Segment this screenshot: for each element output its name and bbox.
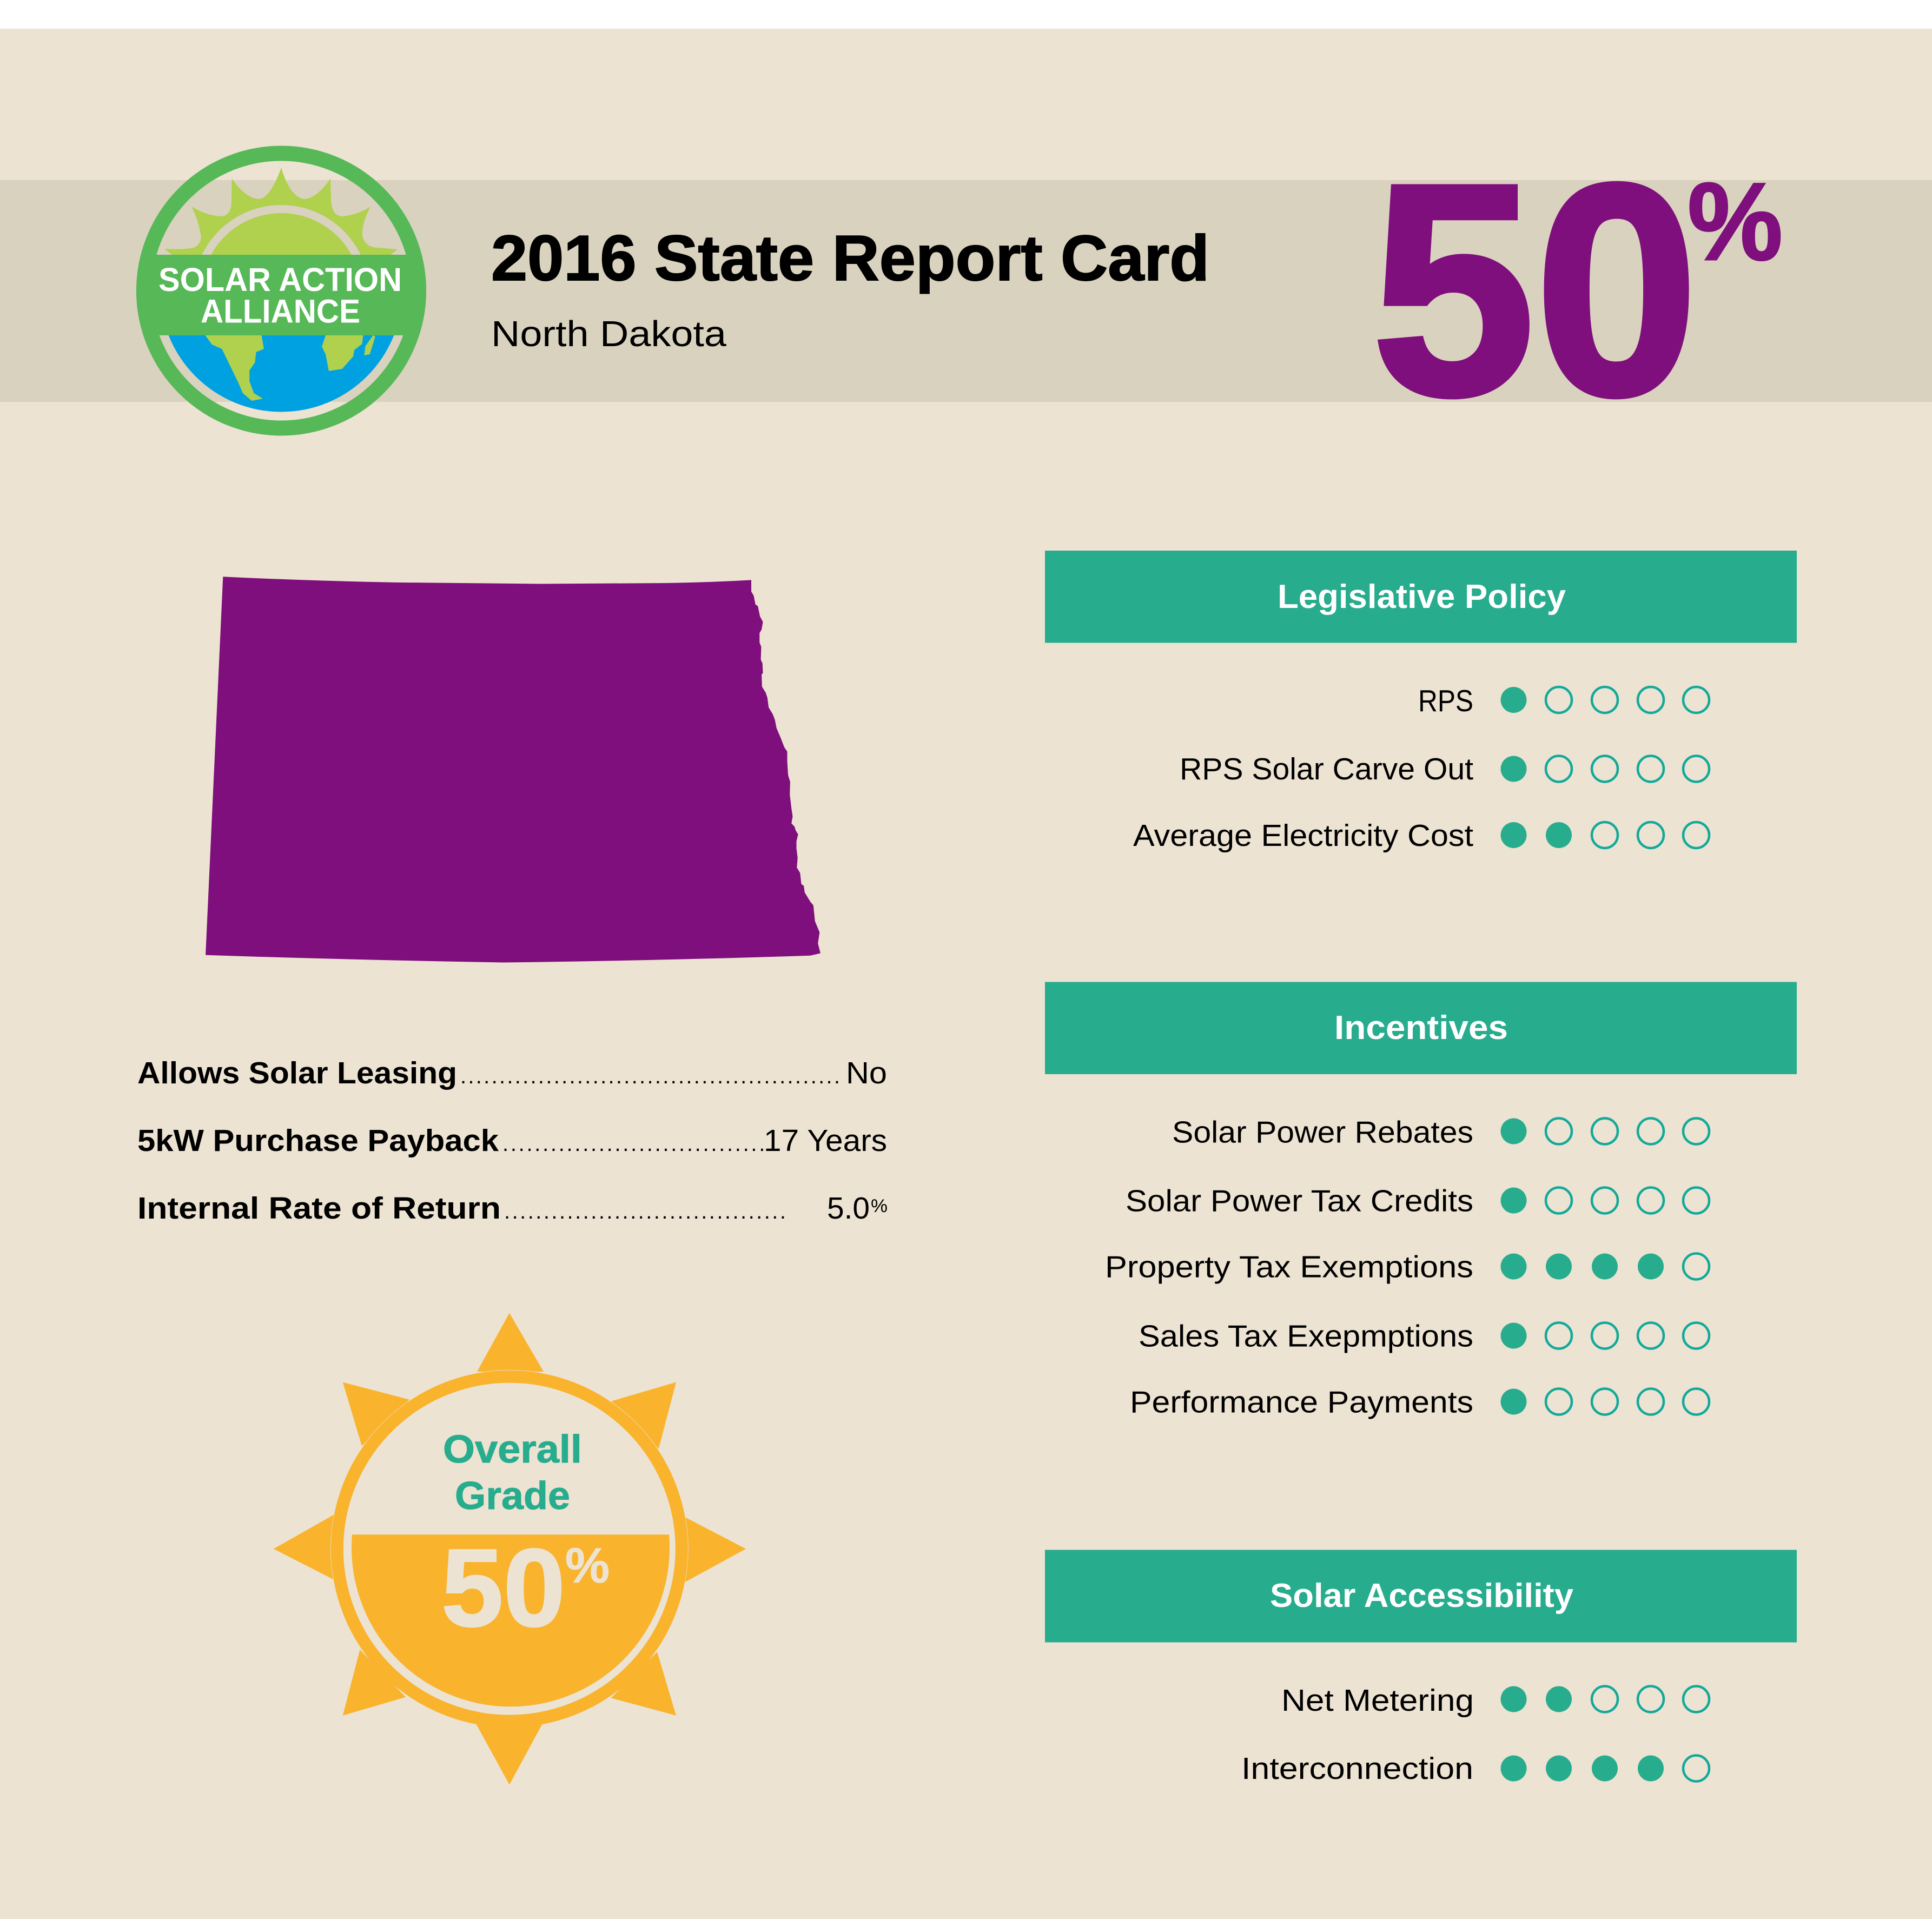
facts list: [137, 1056, 888, 1226]
big score 50%: 50: [1372, 122, 1698, 458]
row: solar power tax credits: Solar Power Tax Credits: [1126, 1183, 1473, 1218]
panel: incentives: [1045, 982, 1797, 1419]
logo: Solar Action Alliance: [136, 154, 426, 428]
panel: legislative policy: [1045, 551, 1797, 853]
overall grade sun badge: [274, 1313, 746, 1785]
logo banner: [136, 255, 426, 335]
row: net metering: [1281, 1683, 1709, 1718]
fact: purchase payback: ...................................: [502, 1132, 781, 1156]
title: 2016 State Report Card: [491, 222, 1209, 294]
heading: solar accessibility: Solar Accessibility: [1270, 1577, 1574, 1614]
row: average electricity cost: Average Electricity Cost: [1133, 818, 1473, 853]
row: RPS solar carve out: RPS Solar Carve Out: [1180, 752, 1473, 786]
fact: internal rate of return: [137, 1191, 888, 1226]
logo sun disk: [202, 205, 361, 255]
row: performance payments: [1130, 1385, 1709, 1419]
row: property tax exemptions: Property Tax Exemptions: [1105, 1249, 1473, 1284]
row: solar power rebates: Solar Power Rebates: [1172, 1115, 1473, 1150]
fact: internal rate of return: 5.0: [827, 1191, 870, 1226]
panel: solar accessibility: [1045, 1550, 1797, 1786]
logo sun rays: [164, 168, 398, 255]
row: sales tax exemptions: Sales Tax Exepmptions: [1139, 1319, 1473, 1353]
sun rays, upper: [274, 1313, 746, 1583]
fact: solar leasing: No: [846, 1056, 887, 1090]
fact: internal rate of return: %: [871, 1196, 888, 1216]
row: interconnection: Interconnection: [1241, 1751, 1473, 1786]
row: interconnection: [1241, 1751, 1709, 1786]
row: performance payments: Performance Payments: [1130, 1385, 1473, 1419]
row: solar power rebates: [1172, 1115, 1709, 1150]
logo text: [158, 261, 402, 330]
fact: internal rate of return: Internal Rate of Return: [137, 1191, 501, 1226]
fact: purchase payback: 17 Years: [764, 1123, 887, 1158]
row: average electricity cost: [1133, 818, 1709, 853]
fact: internal rate of return: ....................................: [504, 1200, 786, 1223]
grade value: 50: [441, 1526, 565, 1650]
fact: solar leasing: Allows Solar Leasing: [137, 1056, 457, 1090]
grade value: %: [565, 1538, 610, 1593]
fact: solar leasing: [137, 1056, 887, 1090]
sun rays, lower: [343, 1650, 676, 1785]
state map: North Dakota: [206, 577, 820, 962]
row: solar power tax credits: [1126, 1183, 1709, 1218]
fact: solar leasing: .................................................: [460, 1064, 840, 1088]
fact: purchase payback: [137, 1123, 887, 1158]
overall grade label: Overall: [443, 1428, 582, 1471]
row: RPS: RPS: [1418, 684, 1473, 718]
row: property tax exemptions: [1105, 1249, 1709, 1284]
logo green ring: [144, 154, 419, 428]
row: sales tax exemptions: [1139, 1319, 1709, 1353]
overall grade label: Grade: [455, 1474, 570, 1518]
heading: legislative policy: [1045, 551, 1797, 643]
overall grade label: [443, 1428, 582, 1518]
logo text: ALLIANCE: [201, 293, 360, 330]
lower half disk: [352, 1534, 670, 1706]
logo text: SOLAR ACTION: [158, 261, 402, 298]
row: net metering: Net Metering: [1281, 1683, 1474, 1718]
sun outer ring: [337, 1377, 682, 1721]
row: RPS solar carve out: [1180, 752, 1709, 786]
heading: incentives: [1045, 982, 1797, 1074]
subtitle: state name: North Dakota: [491, 314, 727, 354]
row: RPS: [1418, 684, 1709, 718]
header band: [0, 180, 1932, 402]
fact: purchase payback: 5kW Purchase Payback: [137, 1123, 499, 1158]
heading: incentives: Incentives: [1334, 1009, 1508, 1047]
big score 50%: %: [1688, 160, 1783, 283]
heading: legislative policy: Legislative Policy: [1278, 578, 1566, 616]
logo globe: [169, 335, 394, 412]
heading: solar accessibility: [1045, 1550, 1797, 1642]
